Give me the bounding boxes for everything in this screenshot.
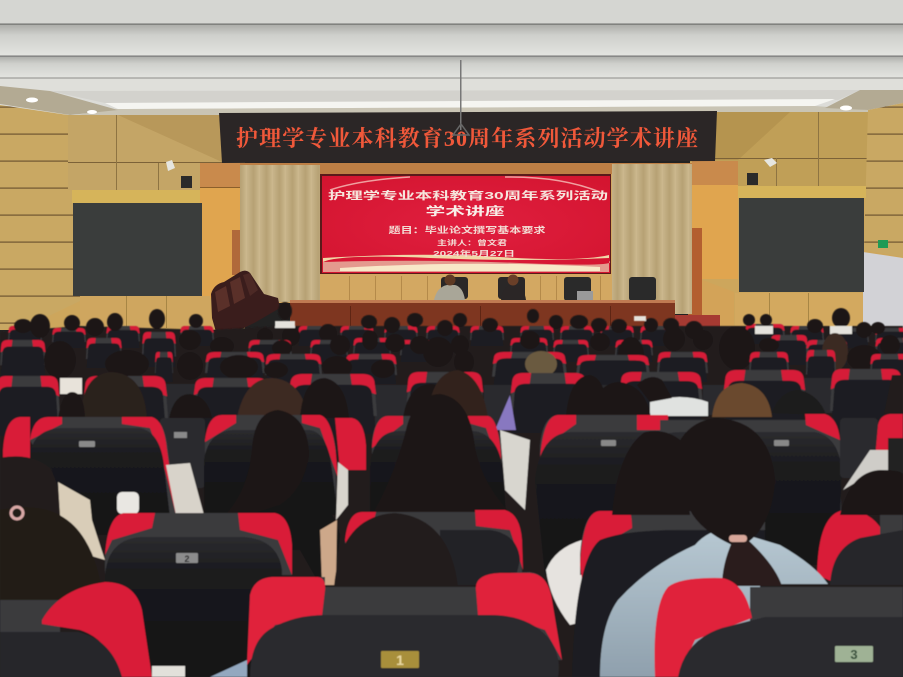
left wall [0, 105, 245, 330]
jeans strip [210, 660, 247, 677]
right wall TV [739, 198, 864, 292]
exit sign [878, 240, 888, 248]
small seat right of centre [335, 418, 366, 470]
person: long hair centre [372, 394, 512, 515]
seat number one: 1 [396, 652, 404, 668]
LED banner [219, 111, 717, 163]
far row two heads [179, 326, 900, 373]
projector mount [453, 60, 469, 135]
row four seats [0, 369, 903, 436]
seat six [660, 414, 842, 565]
wall speaker right [764, 158, 777, 167]
seat row two far right [817, 510, 903, 585]
screen title line 2: 学术讲座 [426, 204, 505, 218]
screen topic: 题目：毕业论文撰写基本要求 [388, 225, 546, 235]
seat row two right of centre [572, 511, 765, 677]
row four small seats [165, 378, 832, 425]
empty chair 3 [564, 277, 591, 301]
screen presenter: 主讲人：曾文君 [437, 238, 507, 247]
row four clothing [60, 378, 708, 430]
seat number three [835, 646, 873, 662]
presenter right [501, 274, 526, 300]
laptop [577, 291, 593, 301]
empty chair 4 [629, 277, 656, 301]
row two seats [105, 510, 903, 677]
stage panels lines [349, 276, 601, 300]
red floor [675, 315, 720, 329]
seat number two: 2 [184, 554, 190, 564]
front row left seat [0, 582, 152, 677]
seat behind short hair [345, 510, 523, 585]
screen gold waves [323, 177, 610, 272]
person: back-left head [0, 456, 60, 520]
person: front left with hair tie [0, 507, 103, 605]
screen title line 1: 护理学专业本科教育30周年系列活动 [328, 189, 608, 202]
right wall [688, 103, 903, 335]
beige shirt left [58, 482, 105, 560]
person: denim jacket [600, 418, 828, 677]
far right seat [840, 414, 903, 478]
white tote bag [166, 463, 204, 515]
stage sofa [211, 271, 280, 332]
LED banner: 护理学专业本科教育30周年系列活动学术讲座 [236, 126, 699, 151]
left curtain [240, 165, 320, 302]
far row one heads [14, 302, 885, 346]
left wall TV [73, 203, 202, 296]
wall camera right [747, 173, 758, 185]
near far row seats [155, 350, 903, 387]
wall camera left [181, 176, 192, 188]
stage chairs and speakers [434, 274, 656, 301]
far row one seats [8, 324, 903, 348]
front row right seat [655, 578, 903, 677]
seat number one [381, 651, 419, 668]
person: black shirt with ponytail [210, 410, 340, 585]
white shirt sliver [336, 462, 348, 520]
audience background [0, 326, 903, 677]
presenter left [434, 274, 465, 300]
back wall [240, 163, 692, 303]
seat number two [105, 513, 292, 677]
seat 4 [30, 417, 176, 535]
wall speaker left [166, 160, 175, 171]
white shirt behind seat [546, 540, 582, 625]
row three seats [3, 414, 903, 575]
person: far right dark hair [840, 470, 903, 515]
person: short hair front [334, 513, 458, 587]
glasses girl and row heads [44, 337, 557, 380]
screen date: 2024年5月27日 [433, 248, 515, 258]
far right person shirt [843, 450, 888, 490]
seat number tag behind [174, 432, 187, 438]
speaker chair 2 [498, 277, 525, 299]
ceiling [0, 0, 903, 116]
projection screen [320, 174, 611, 274]
far row two seats [0, 332, 903, 376]
audience [0, 302, 903, 677]
seat behind aisle [160, 418, 205, 488]
seat behind left [3, 417, 30, 460]
seat middle left [204, 415, 338, 515]
speaker chair 1 [441, 277, 468, 299]
seat middle centre [370, 416, 506, 515]
water bottle [117, 492, 139, 514]
row four heads [58, 370, 903, 420]
right curtain [612, 164, 692, 314]
white shirt centre [500, 430, 530, 510]
white shirts far [275, 316, 852, 334]
seat number three: 3 [850, 647, 858, 662]
front row centre seat [247, 572, 562, 677]
white clothing strip [152, 666, 185, 677]
seat five [535, 415, 668, 575]
stage table [290, 300, 675, 331]
